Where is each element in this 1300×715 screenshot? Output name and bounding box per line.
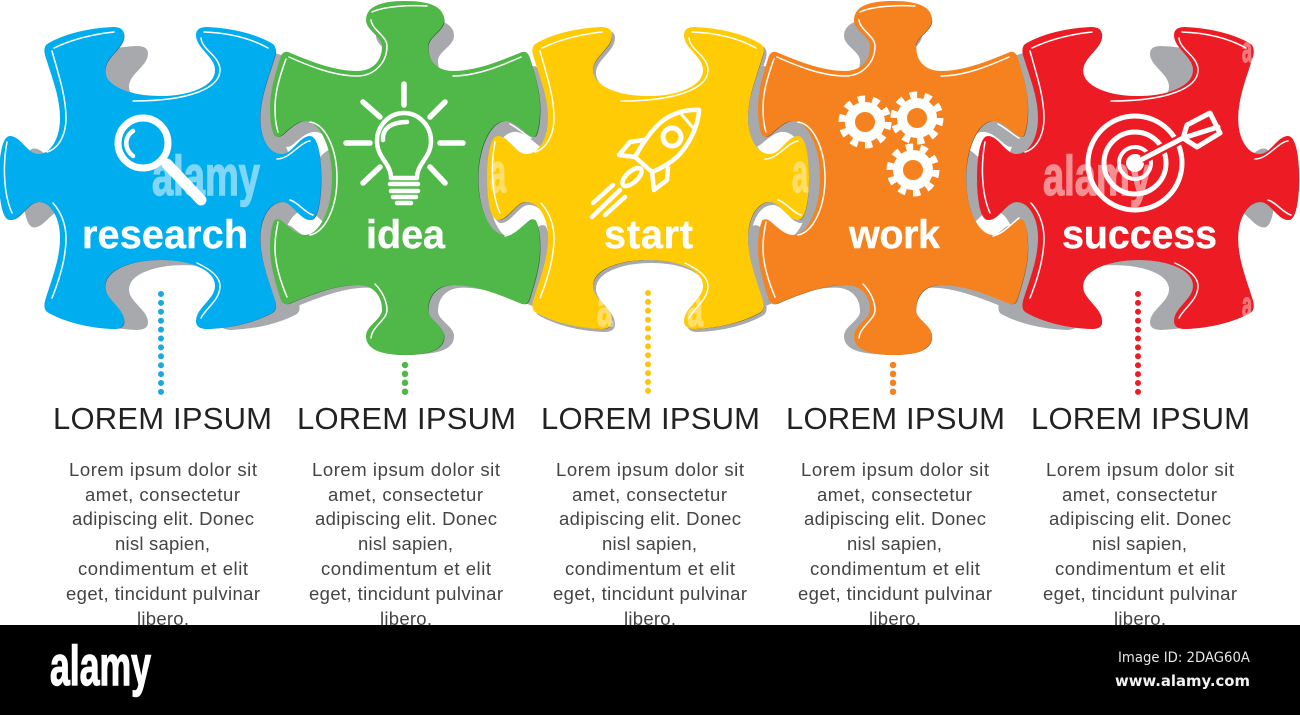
text block: column 5: condimentum et elit	[1055, 558, 1225, 579]
text block: column 1	[66, 459, 260, 629]
panel: success puzzle piece	[978, 28, 1299, 329]
watermark: blue: alamy	[152, 144, 260, 207]
text block: column 3	[553, 459, 747, 629]
watermark: yellow fragments: a	[490, 141, 506, 204]
text block: column 3: condimentum et elit	[565, 558, 735, 579]
watermark: red: a	[1242, 29, 1252, 70]
text block: column 4: eget, tincidunt pulvinar	[798, 583, 992, 604]
text block: column 3: adipiscing elit. Donec	[559, 508, 741, 529]
text block: column 2: amet, consectetur	[328, 484, 483, 505]
text block: column 5: adipiscing elit. Donec	[1049, 508, 1231, 529]
panel: idea puzzle piece	[271, 2, 540, 355]
text block: column 1: nisl sapien,	[115, 533, 210, 554]
text block: column 5: nisl sapien,	[1092, 533, 1187, 554]
piece shadows	[24, 19, 1274, 353]
text block: column 2: nisl sapien,	[358, 533, 453, 554]
icon: rocket	[592, 110, 699, 217]
icon: magnifier	[118, 118, 201, 200]
text block: column 4: nisl sapien,	[847, 533, 942, 554]
watermark: red	[1043, 29, 1252, 325]
text block: column 4: amet, consectetur	[817, 484, 972, 505]
text block: column 1: amet, consectetur	[85, 484, 240, 505]
watermark: yellow fragments	[490, 141, 808, 338]
text block: column 3: libero.	[624, 608, 676, 629]
heading: column 2: LOREM IPSUM	[297, 401, 516, 436]
text block: column 2: adipiscing elit. Donec	[315, 508, 497, 529]
heading: column 3: LOREM IPSUM	[541, 401, 760, 436]
text block: column 2: Lorem ipsum dolor sit	[312, 459, 500, 480]
icon: target with arrow	[1088, 113, 1220, 210]
text block: column 4: libero.	[869, 608, 921, 629]
icon: light bulb	[346, 84, 463, 203]
text block: column 5: libero.	[1114, 608, 1166, 629]
dotted connector: orange	[890, 365, 896, 393]
image id: Image ID: 2DAG60A	[1118, 650, 1250, 666]
label: start: start	[604, 213, 693, 257]
watermark: red: a	[1242, 284, 1252, 325]
text block: column 5: amet, consectetur	[1062, 484, 1217, 505]
text block: column 1: eget, tincidunt pulvinar	[66, 583, 260, 604]
panel: start puzzle piece	[488, 28, 809, 338]
icon: gears	[843, 96, 939, 192]
text block: column 5: eget, tincidunt pulvinar	[1043, 583, 1237, 604]
label: research: research	[82, 213, 248, 257]
dotted connector: red	[1135, 294, 1141, 393]
text block: column 2: eget, tincidunt pulvinar	[309, 583, 503, 604]
panel: work puzzle piece	[759, 2, 1028, 355]
text block: column 1: Lorem ipsum dolor sit	[69, 459, 257, 480]
dotted connector: blue	[158, 294, 164, 393]
text block: column 1: libero.	[137, 608, 189, 629]
text block: column 3: nisl sapien,	[602, 533, 697, 554]
text block: column 1: condimentum et elit	[78, 558, 248, 579]
text block: column 1: adipiscing elit. Donec	[72, 508, 254, 529]
heading: column 5: LOREM IPSUM	[1031, 401, 1250, 436]
watermark: yellow fragments: a	[687, 275, 703, 338]
text block: column 3: eget, tincidunt pulvinar	[553, 583, 747, 604]
text block: column 4: condimentum et elit	[810, 558, 980, 579]
text block: column 3: amet, consectetur	[572, 484, 727, 505]
label: work: work	[848, 213, 940, 257]
text block: column 4: Lorem ipsum dolor sit	[801, 459, 989, 480]
watermark: yellow fragments: a	[792, 141, 808, 204]
text block: column 2	[309, 459, 503, 629]
watermark: red: alamy	[1043, 144, 1151, 207]
watermark: yellow fragments: a	[597, 275, 613, 338]
dotted connector: green	[402, 365, 408, 393]
text block: column 5	[1043, 459, 1237, 629]
footer logo: alamy	[50, 634, 151, 697]
panel: research puzzle piece	[0, 28, 322, 329]
footer bar	[0, 625, 1300, 715]
heading: column 4: LOREM IPSUM	[786, 401, 1005, 436]
text block: column 3: Lorem ipsum dolor sit	[556, 459, 744, 480]
text block: column 4	[798, 459, 992, 629]
dotted connector: yellow	[645, 293, 651, 393]
label: idea: idea	[366, 213, 446, 257]
text block: column 2: libero.	[380, 608, 432, 629]
label: success: success	[1062, 213, 1217, 257]
website: www.alamy.com	[1115, 672, 1250, 690]
text block: column 5: Lorem ipsum dolor sit	[1046, 459, 1234, 480]
text block: column 4: adipiscing elit. Donec	[804, 508, 986, 529]
text block: column 2: condimentum et elit	[321, 558, 491, 579]
heading: column 1: LOREM IPSUM	[53, 401, 272, 436]
